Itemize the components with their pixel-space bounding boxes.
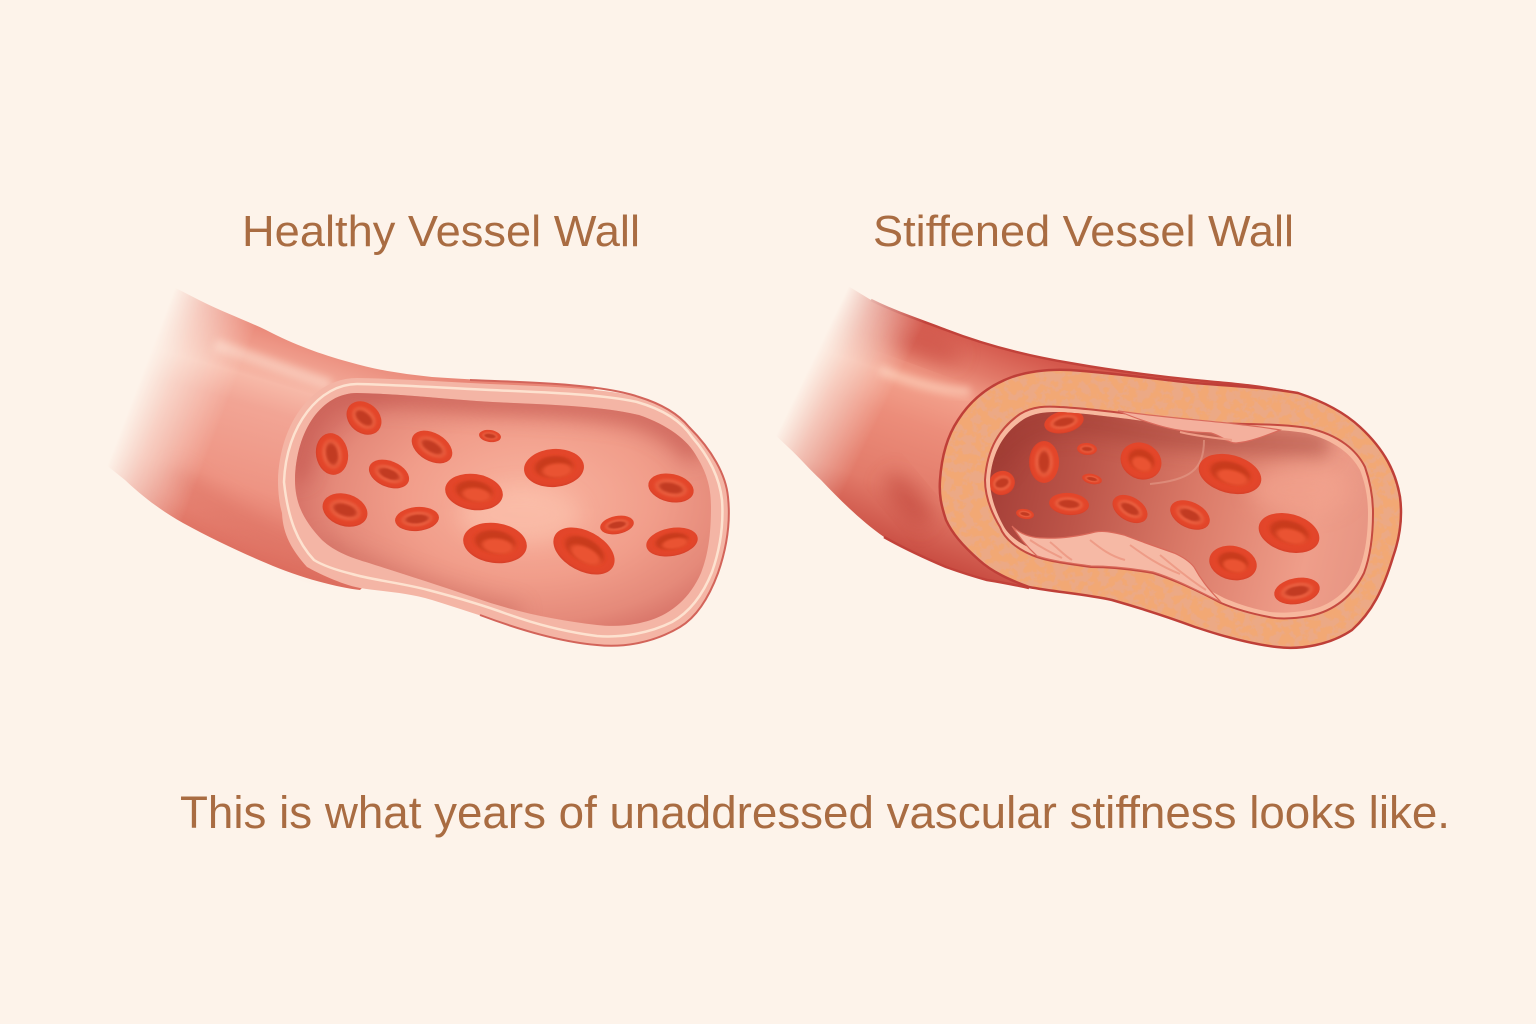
wall pale inner line [284, 384, 722, 636]
illustration: healthy vessel [100, 280, 730, 646]
vessel outer tube [100, 280, 597, 590]
thick fibrous wall ring [940, 370, 1401, 648]
vessel outer tube [770, 278, 1290, 588]
ring red outline [940, 370, 1401, 648]
ring texture [940, 370, 1401, 648]
vessel wall ring [278, 378, 729, 646]
heading: stiffened vessel wall: Stiffened Vessel Wall [873, 207, 1294, 256]
plaque: bottom [1012, 526, 1221, 602]
wall red outer edge [470, 380, 729, 646]
caption: This is what years of unaddressed vascular stiffness looks like. [180, 787, 1450, 838]
illustration: stiffened vessel [770, 278, 1401, 648]
lumen interior [295, 393, 711, 626]
lumen interior [990, 412, 1368, 612]
plaque: top [1118, 411, 1280, 443]
lumen lining [985, 407, 1373, 618]
plaque folds [1030, 432, 1232, 590]
red blood cells [986, 407, 1324, 608]
red blood cells [313, 394, 700, 584]
heading: healthy vessel wall: Healthy Vessel Wall [242, 207, 640, 256]
